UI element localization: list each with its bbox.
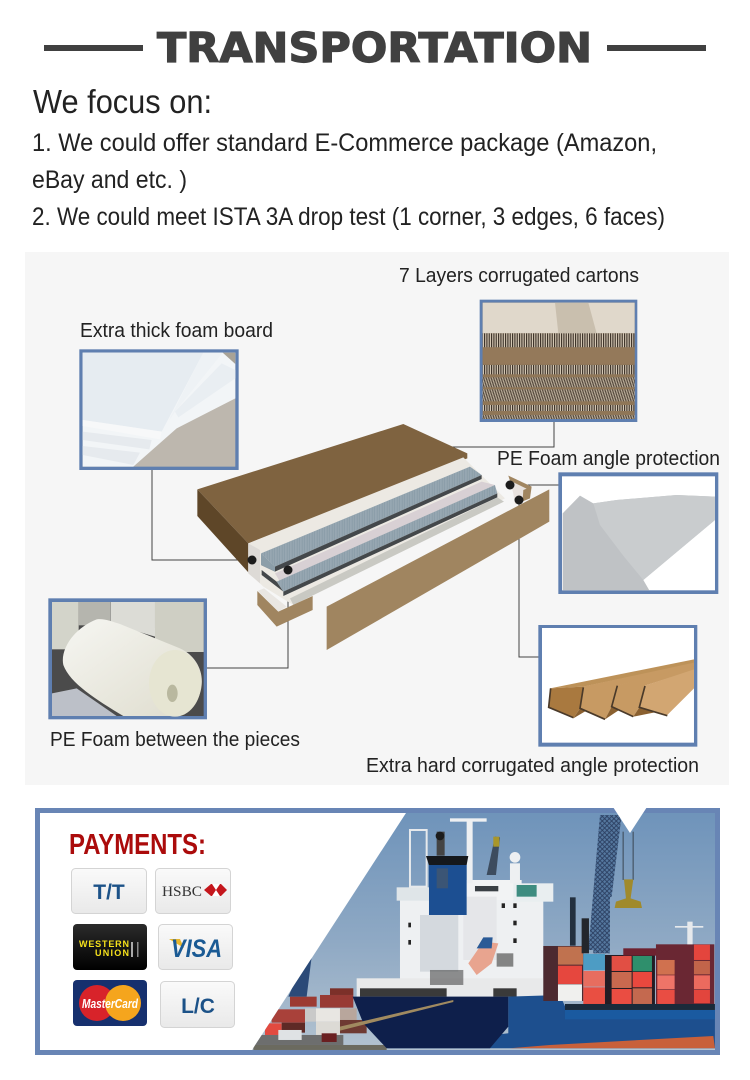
- funnel: [426, 832, 468, 915]
- card: L/C: L/C: [181, 995, 215, 1018]
- card: T/T: [72, 868, 146, 914]
- product illustration: layered package: [197, 424, 549, 650]
- label: foam board: Extra thick foam board: [80, 320, 273, 342]
- photo: corrugated cartons: [480, 300, 637, 422]
- card: VISA: [158, 924, 232, 970]
- photo: PE foam angle: [558, 472, 718, 594]
- heading: payments: PAYMENTS:: [69, 829, 206, 861]
- label: PE foam between: PE Foam between the pieces: [50, 729, 300, 751]
- text block: we focus on: We focus on:: [33, 83, 212, 120]
- card: HSBC: [156, 868, 230, 914]
- photo: foam board: [79, 349, 239, 470]
- title: [44, 24, 706, 72]
- photo: PE foam roll: [48, 598, 207, 719]
- panel: packaging diagram: [25, 252, 729, 785]
- photo: corrugated angle protection: [538, 625, 697, 747]
- photo: container ship: [250, 810, 717, 1050]
- card: MasterCard: [73, 980, 147, 1026]
- label: cartons: 7 Layers corrugated cartons: [399, 265, 639, 287]
- card: MasterCard: MasterCard: [82, 996, 139, 1011]
- card: HSBC: HSBC: [162, 884, 202, 900]
- text block: we focus on: eBay and etc. ): [32, 166, 187, 194]
- card: Western Union: WESTERN: [79, 939, 129, 949]
- card: T/T: T/T: [93, 881, 125, 904]
- card: Western Union: UNION: [95, 948, 129, 958]
- connector dots: [248, 480, 524, 574]
- card: VISA: VISA: [171, 935, 222, 963]
- panel: payments and shipping: [38, 807, 718, 1052]
- leader lines: [152, 422, 559, 668]
- containers: [543, 944, 715, 1010]
- label: PE foam angle: PE Foam angle protection: [497, 448, 720, 470]
- hull: [340, 995, 715, 1048]
- notch: [613, 807, 647, 833]
- crane: [570, 815, 703, 953]
- text block: we focus on: 1. We could offer standard E-Commerce package (Amazon,: [32, 129, 657, 157]
- label: corrugated angle: Extra hard corrugated angle protection: [366, 755, 699, 777]
- card: L/C: [160, 982, 234, 1028]
- text block: we focus on: 2. We could meet ISTA 3A drop test (1 corner, 3 edges, 6 faces): [32, 203, 665, 231]
- superstructure: [357, 818, 553, 997]
- card: Western Union: [73, 924, 147, 970]
- quay containers: [253, 957, 387, 1050]
- text block: we focus on: [32, 83, 665, 231]
- title: TRANSPORTATION: [157, 24, 592, 72]
